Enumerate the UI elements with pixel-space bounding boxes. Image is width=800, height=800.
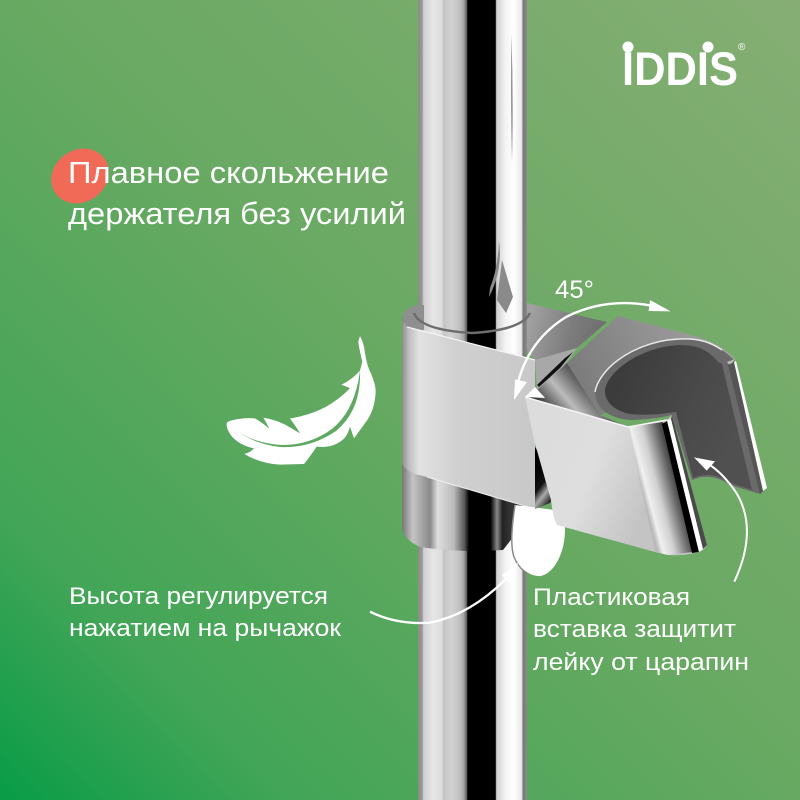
collar lower body <box>402 318 535 551</box>
lever <box>512 505 565 576</box>
logo: IDDIS <box>622 42 738 95</box>
cylinder neck <box>525 363 628 427</box>
arrow: plastic insert <box>694 457 747 582</box>
arrow: lever <box>370 563 518 623</box>
heading: держателя без усилий <box>68 196 406 231</box>
text: plastic insert: Пластиковая <box>533 584 690 611</box>
text: height adjustment: Высота регулируется <box>69 583 328 610</box>
chrome shower rail <box>418 0 527 800</box>
neck triangle <box>535 348 577 390</box>
reflection on rail <box>489 35 513 313</box>
holder white stripe <box>667 419 703 552</box>
collar ring <box>414 313 530 333</box>
holder front plate <box>525 397 707 555</box>
holder cup shadow <box>605 345 752 490</box>
holder cup interior <box>595 339 760 494</box>
text: height adjustment: нажатием на рычажок <box>69 615 342 642</box>
icon: feather <box>227 336 376 465</box>
holder right edge <box>728 362 767 494</box>
holder rim highlight <box>595 339 722 392</box>
arrow: rotation 45 degrees <box>514 300 671 400</box>
holder chrome bend <box>628 422 693 555</box>
label: 45 degrees: 45° <box>555 276 594 304</box>
text: plastic insert: лейку от царапин <box>533 649 749 676</box>
text: height adjustment <box>69 583 342 642</box>
holder dark edge <box>671 415 707 549</box>
feather shaft <box>238 371 360 447</box>
heading: Плавное скольжение <box>68 155 389 190</box>
logo: ® <box>738 42 746 53</box>
holder black stripe <box>662 421 699 553</box>
icon: red circle accent <box>41 137 119 215</box>
text: plastic insert: вставка защитит <box>533 616 736 643</box>
collar front plate <box>402 320 535 509</box>
holder top face <box>567 316 735 415</box>
heading <box>68 155 406 231</box>
text: plastic insert <box>533 584 749 676</box>
holder arm top <box>527 303 607 360</box>
slider and holder <box>402 303 767 576</box>
hinge <box>535 447 560 509</box>
collar left rim <box>402 305 424 330</box>
